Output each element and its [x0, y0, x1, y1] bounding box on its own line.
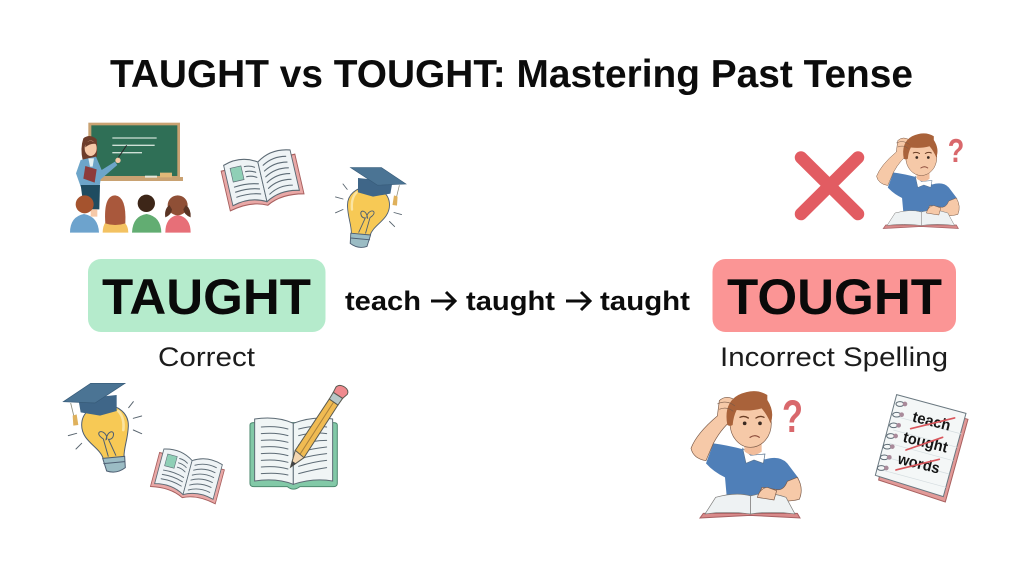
TAUGHT badge background — [88, 259, 326, 332]
TAUGHT word: TAUGHT — [102, 269, 311, 325]
icon: lightbulb with graduation cap top — [336, 168, 406, 247]
TOUGHT word: TOUGHT — [727, 269, 942, 325]
word: taught: taught — [600, 286, 690, 316]
icon: notebook with crossed-out words: tought — [901, 429, 949, 457]
word: teach: teach — [345, 286, 421, 316]
Correct label: Correct — [158, 342, 256, 372]
icon: notebook with crossed-out words — [875, 395, 968, 502]
icon: confused boy bottom — [691, 391, 803, 518]
icon: open book with pencil — [250, 385, 348, 489]
icon: notebook with crossed-out words: words — [895, 450, 942, 478]
icon: teacher at chalkboard with students — [70, 123, 191, 233]
panel: TOUGHT incorrect word — [712, 259, 956, 372]
arrow — [566, 292, 590, 310]
icon: red cross — [801, 158, 858, 214]
icon: open book top — [220, 147, 305, 214]
title: TAUGHT vs TOUGHT: Mastering Past Tense — [110, 53, 913, 96]
icon: confused boy top — [877, 132, 964, 228]
icon: confused boy top: ? — [948, 132, 964, 170]
arrow — [431, 292, 455, 310]
Incorrect Spelling label: Incorrect Spelling — [720, 342, 948, 372]
icon: confused boy bottom: ? — [782, 391, 803, 442]
panel: TAUGHT correct word — [88, 259, 326, 372]
icon: notebook with crossed-out words: teach — [911, 409, 952, 435]
verb forms sequence — [345, 286, 690, 316]
word: taught: taught — [466, 286, 555, 316]
icon: open book bottom — [150, 446, 226, 506]
TOUGHT badge background — [712, 259, 956, 332]
icon: lightbulb with graduation cap bottom — [63, 383, 142, 472]
